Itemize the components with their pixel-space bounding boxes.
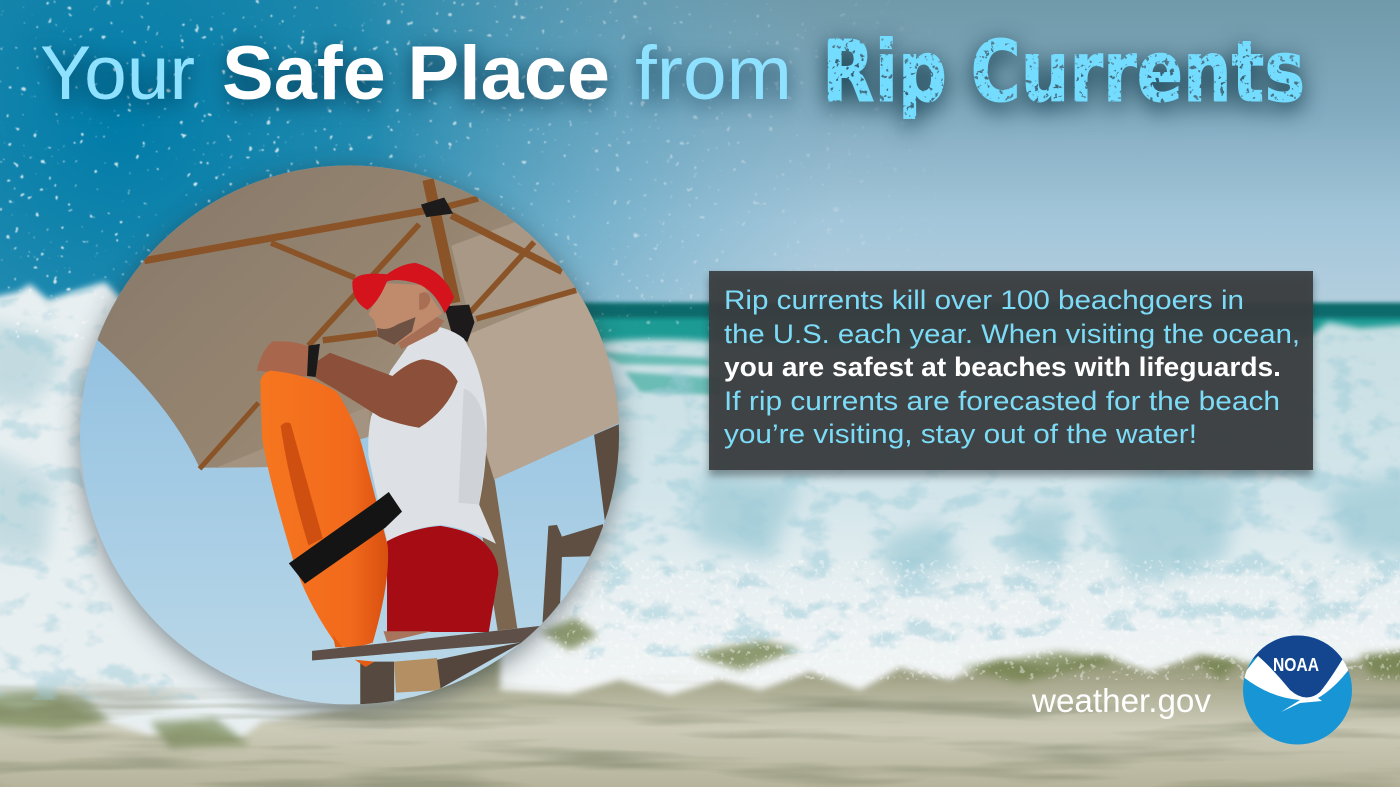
watch bbox=[307, 344, 320, 377]
umbrella ribs bbox=[144, 180, 576, 469]
buoy strap bbox=[289, 492, 402, 584]
title bbox=[40, 23, 1305, 122]
beard bbox=[377, 317, 416, 345]
photo sky bbox=[80, 160, 623, 710]
message text: Rip currents kill over 100 beachgoers in bbox=[724, 285, 1244, 315]
neck bbox=[398, 317, 444, 349]
lifeguard tower wood bbox=[360, 424, 619, 706]
title: your: Your bbox=[40, 31, 195, 116]
photo shadow ring bbox=[78, 170, 620, 712]
title: rip currents: Rip Currents bbox=[822, 23, 1305, 122]
lifeguard figure bbox=[257, 263, 498, 642]
message panel shadow bbox=[709, 276, 1313, 476]
message text: If rip currents are forecasted for the beach bbox=[724, 386, 1280, 416]
message text bbox=[724, 285, 1300, 449]
website url: weather.gov bbox=[1031, 682, 1211, 719]
message text: the U.S. each year. When visiting the ocean, bbox=[724, 319, 1300, 349]
title: safe place: Safe Place bbox=[222, 31, 610, 116]
umbrella pole bbox=[479, 454, 518, 630]
forearm and upper arm bbox=[316, 353, 458, 428]
title: from: from bbox=[635, 31, 792, 116]
circular photo: lifeguard under umbrella bbox=[80, 160, 651, 710]
legs bbox=[383, 631, 432, 642]
orange rescue buoy bbox=[260, 371, 402, 667]
shirt bbox=[368, 325, 496, 544]
icon: NOAA logo bbox=[1240, 630, 1355, 744]
message panel bbox=[709, 271, 1313, 470]
NOAA wordmark: NOAA bbox=[1273, 655, 1319, 675]
message text: you’re visiting, stay out of the water! bbox=[724, 419, 1197, 449]
message text: you are safest at beaches with lifeguards. bbox=[724, 352, 1281, 382]
tower platform bbox=[312, 626, 541, 661]
shorts bbox=[387, 526, 498, 632]
ear bbox=[419, 292, 431, 310]
cap bbox=[352, 263, 454, 314]
hand bbox=[257, 341, 308, 376]
umbrella canopy bbox=[98, 165, 619, 480]
umbrella hubs bbox=[421, 197, 474, 342]
face bbox=[368, 283, 442, 346]
canopy bright panel bbox=[468, 290, 619, 480]
